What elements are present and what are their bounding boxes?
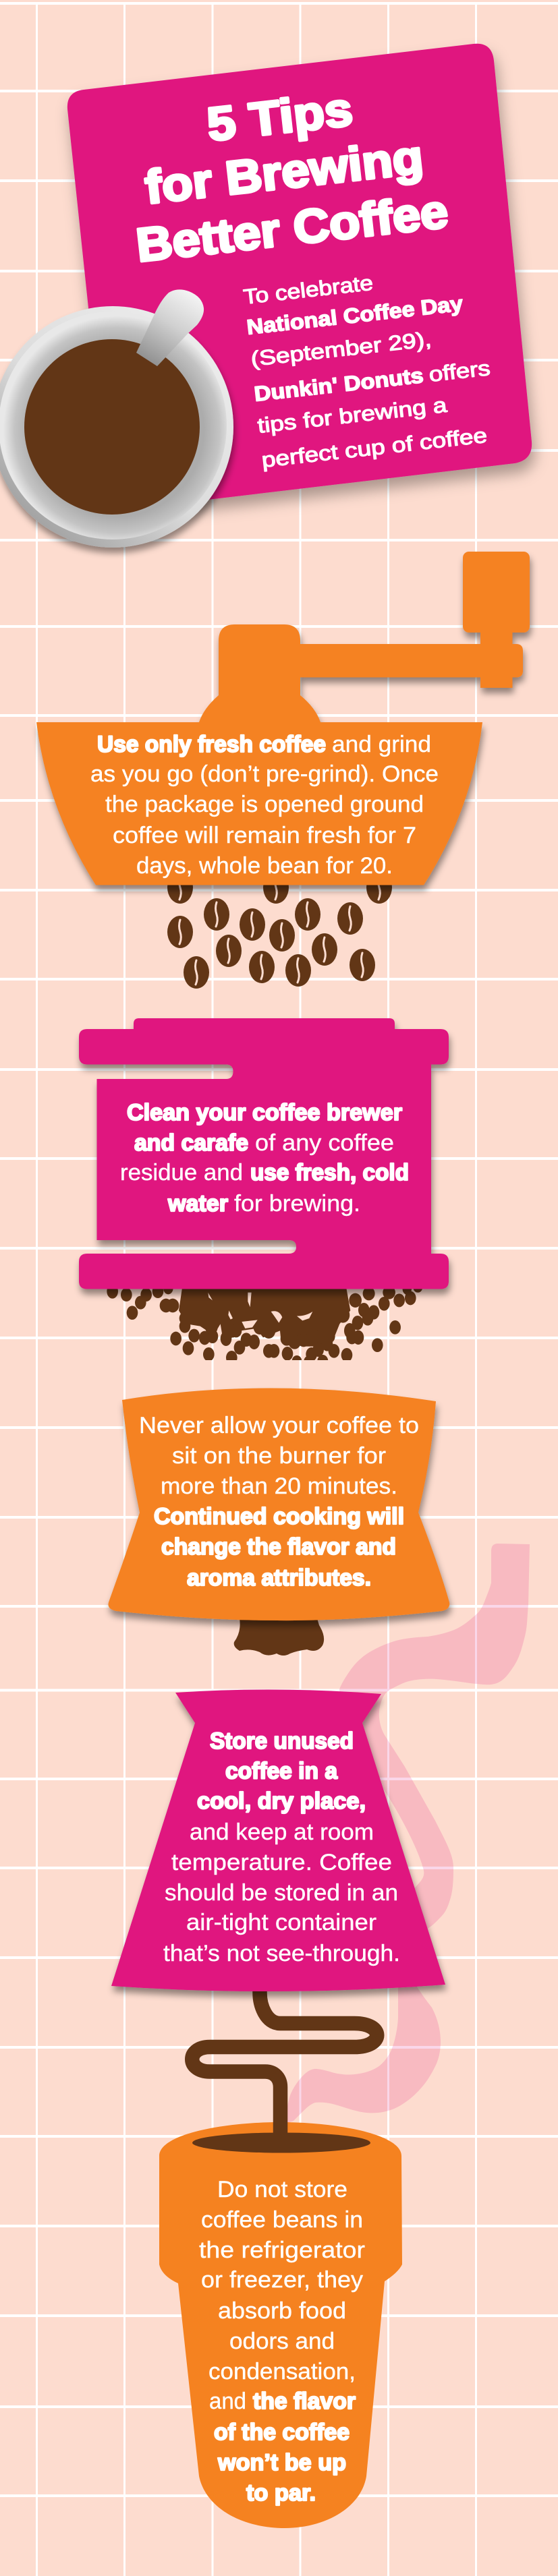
tip 3 text: change the flavor and: [161, 1534, 396, 1560]
tip 2 text: residue and: [120, 1160, 243, 1185]
tip 1 text: as you go (don’t pre-grind). Once: [90, 761, 439, 787]
tip 3 text: Continued cooking will: [154, 1504, 404, 1529]
tip 4 text: temperature. Coffee: [171, 1850, 392, 1875]
tip 3 text: sit on the burner for: [172, 1443, 386, 1469]
tip 5 text: and: [209, 2389, 246, 2414]
tip 5 text: or freezer, they: [201, 2267, 363, 2293]
tip 5 text: Do not store: [217, 2177, 347, 2202]
tip 2 text: for brewing.: [234, 1191, 360, 1217]
tip 3 text: more than 20 minutes.: [161, 1473, 397, 1499]
tip 2 text: water: [167, 1191, 228, 1217]
tip 1 text: [90, 732, 439, 879]
steam ribbon: [283, 1544, 530, 2124]
tip 4 text: air-tight container: [186, 1910, 376, 1935]
tip 5 text: coffee beans in: [201, 2207, 363, 2233]
tip 1 text: and grind: [332, 732, 431, 757]
title intro text: (September 29),: [250, 327, 433, 371]
title heading: for Brewing: [142, 130, 426, 214]
tip 2 text: of any coffee: [255, 1130, 394, 1156]
title intro text: Dunkin' Donuts: [253, 363, 424, 406]
tip 2 text: [120, 1100, 409, 1217]
tip 4 text: should be stored in an: [165, 1880, 398, 1906]
tip 2 text: Clean your coffee brewer: [127, 1100, 402, 1125]
title panel: [67, 44, 532, 509]
tip 5 text: of the coffee: [214, 2420, 350, 2445]
coffee drip under mug: [234, 1618, 324, 1656]
tip 5 text: [199, 2177, 365, 2506]
coffee beans falling from grinder: [167, 871, 392, 989]
tip 4 text: and keep at room: [190, 1819, 374, 1845]
tip 2 text: use fresh, cold: [250, 1160, 409, 1185]
tip 5 text: odors and: [229, 2329, 335, 2354]
title intro text: tips for brewing a: [256, 393, 449, 438]
tip 3 text: [139, 1413, 419, 1591]
icon: coffee cup from above: [0, 289, 233, 548]
icon: mug, tip 3: [108, 1388, 449, 1620]
icon: carafe, tip 4: [111, 1689, 445, 1991]
tip 4 text: coffee in a: [225, 1759, 338, 1784]
tip 1 text: days, whole bean for 20.: [136, 853, 393, 879]
tip 4 text: cool, dry place,: [197, 1788, 366, 1814]
coffee pour squiggle: [192, 1986, 377, 2138]
tip 1 text: Use only fresh coffee: [97, 732, 326, 757]
tip 4 text: that’s not see-through.: [163, 1941, 400, 1966]
tip 1 text: the package is opened ground: [105, 792, 424, 817]
tip 4 text: [163, 1728, 400, 1966]
title intro text: To celebrate: [242, 271, 374, 309]
title intro text: [242, 271, 491, 472]
title heading: Better Coffee: [134, 185, 451, 272]
tip 5 text: the flavor: [253, 2389, 356, 2414]
tip 4 text: Store unused: [210, 1728, 354, 1754]
title intro text: offers: [428, 356, 491, 386]
tip 1 text: coffee will remain fresh for 7: [113, 823, 416, 848]
tip 5 text: to par.: [246, 2480, 316, 2506]
title heading: 5 Tips: [204, 82, 355, 151]
tip 3 text: aroma attributes.: [187, 1565, 371, 1591]
title intro text: National Coffee Day: [246, 291, 465, 339]
coffee grounds under brewer: [107, 1289, 422, 1360]
title intro text: perfect cup of coffee: [260, 423, 489, 472]
tip 3 text: Never allow your coffee to: [139, 1413, 419, 1438]
tip 5 text: the refrigerator: [199, 2237, 365, 2263]
tip 2 text: and carafe: [134, 1130, 248, 1156]
icon: coffee brewer, tip 2: [79, 1018, 449, 1289]
title heading: [134, 82, 451, 272]
icon: takeaway cup, tip 5: [159, 2122, 402, 2528]
tip 5 text: won’t be up: [217, 2450, 346, 2476]
tip 5 text: condensation,: [208, 2359, 356, 2384]
tip 5 text: absorb food: [218, 2298, 346, 2324]
icon: coffee grinder, tip 1: [36, 552, 530, 885]
